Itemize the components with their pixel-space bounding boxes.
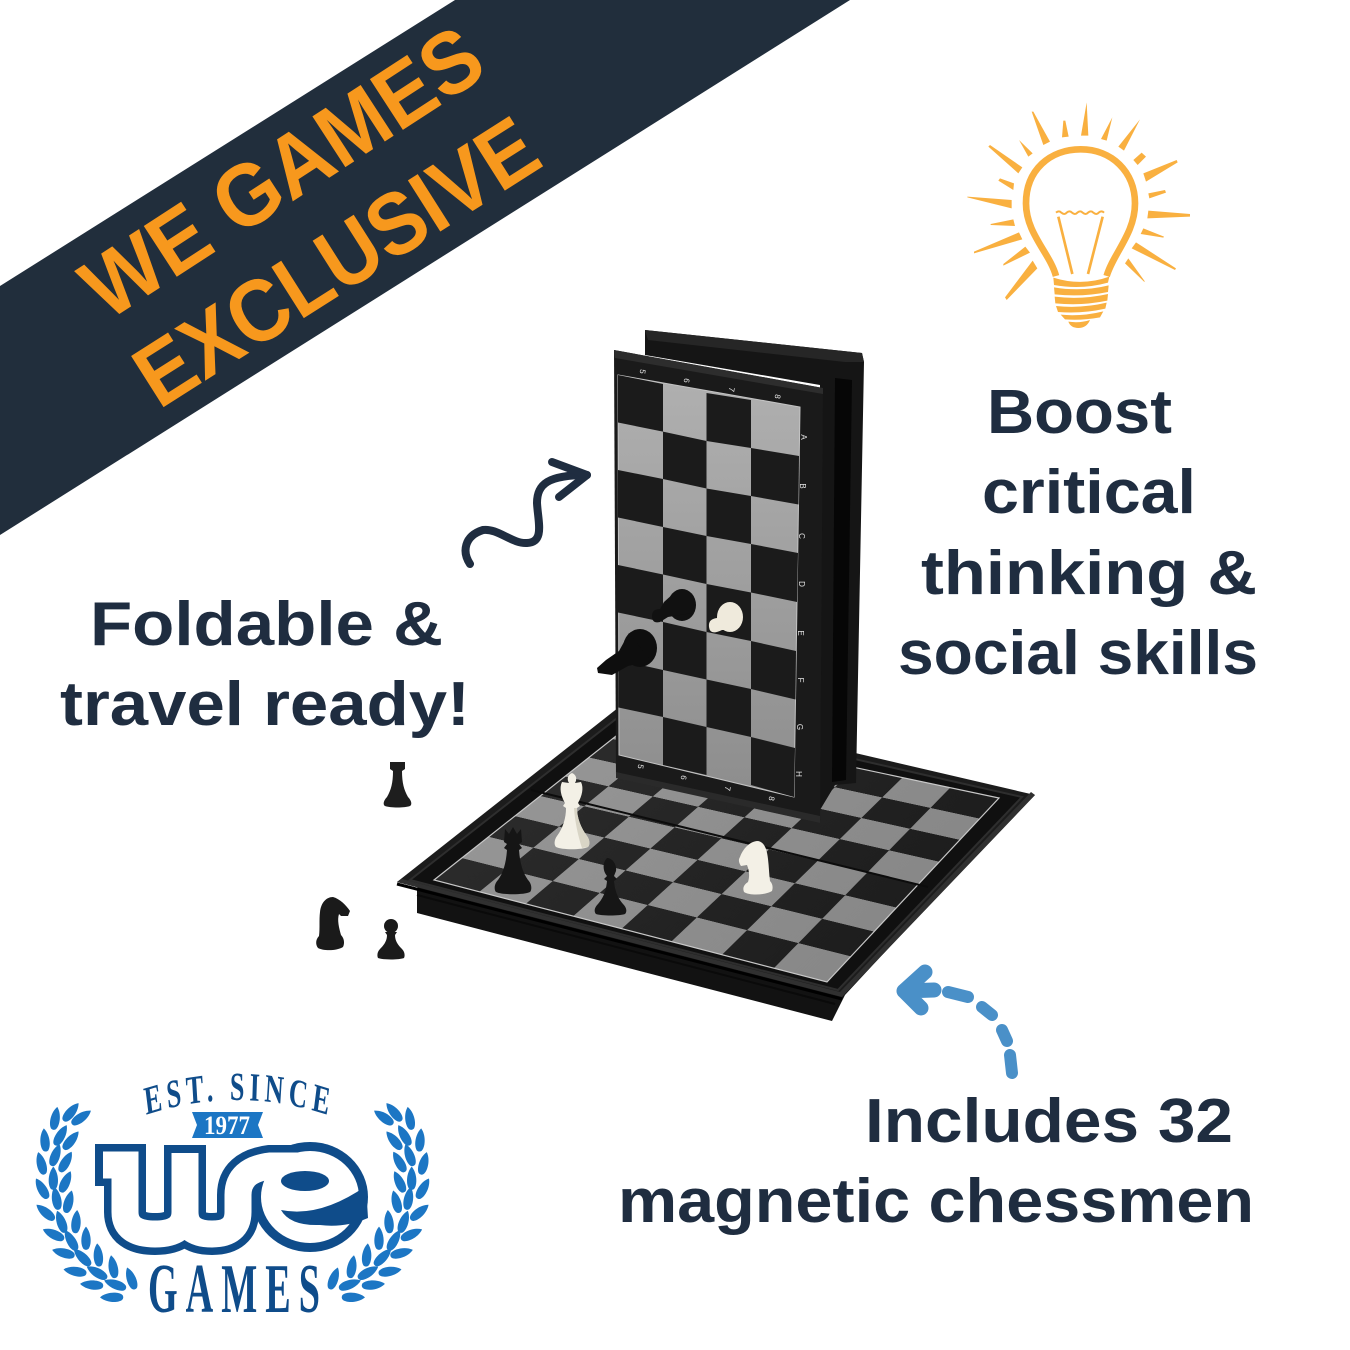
logo laurel wreath left: [32, 1100, 139, 1302]
front panel of fold board: [614, 350, 823, 823]
board coordinate labels: 5: [638, 368, 647, 375]
magnetic piece: black pawn on fold board: [652, 589, 696, 622]
board coordinate labels: D: [797, 581, 806, 587]
board coordinate labels: 5: [636, 763, 645, 770]
board coordinate labels: 6: [679, 774, 688, 781]
flat chess board: base and frame: [397, 700, 1035, 1021]
flat chess board: checker squares: [434, 721, 999, 982]
chess piece: loose black knight: [316, 897, 350, 950]
dark squares of fold board: [618, 375, 799, 797]
board coordinate labels: E: [796, 630, 805, 636]
text: foldable and travel ready: Foldable &: [90, 590, 443, 659]
board coordinate labels: 8: [767, 795, 776, 802]
text: includes 32 magnetic chessmen: Includes 32: [865, 1087, 1233, 1156]
chess piece: black queen on flat board: [495, 827, 531, 894]
text: boost critical thinking and social skills: [898, 378, 1258, 688]
logo text: GAMES: GAMES: [148, 1251, 328, 1328]
light squares of fold board: [618, 375, 800, 797]
text: includes 32 magnetic chessmen: [618, 1087, 1254, 1236]
board coordinate labels: H: [794, 771, 803, 777]
logo laurel wreath right: [326, 1100, 433, 1302]
text: boost critical thinking and social skills: critical: [982, 458, 1196, 527]
chess piece: white knight on flat board: [739, 841, 773, 895]
arrow: squiggle pointing to fold board: [466, 462, 587, 564]
board coordinate labels: 6: [682, 377, 691, 384]
text: boost critical thinking and social skills: thinking &: [921, 539, 1257, 608]
banner: WE Games Exclusive: [0, 0, 850, 535]
chess piece: white king on flat board: [555, 773, 589, 849]
board coordinate labels: 7: [723, 785, 732, 792]
flat board border and hinge: [434, 721, 999, 982]
text: boost critical thinking and social skills: social skills: [898, 619, 1258, 688]
magnetic piece: white pawn on fold board: [709, 602, 743, 632]
board coordinate labels: A: [799, 434, 808, 440]
text: includes 32 magnetic chessmen: magnetic chessmen: [618, 1167, 1254, 1236]
text: boost critical thinking and social skills: Boost: [987, 378, 1172, 447]
icon: light bulb: [967, 102, 1190, 328]
logo wordmark: WE: [95, 1142, 368, 1252]
board coordinate labels: G: [795, 724, 804, 730]
board coordinate labels: F: [796, 678, 805, 683]
logo ribbon: 1977: 1977: [204, 1111, 250, 1140]
logo: WE Games: [36, 1074, 430, 1328]
board coordinate labels: [636, 368, 808, 802]
chess piece: loose black pawn: [377, 919, 405, 960]
text: foldable and travel ready: [60, 590, 470, 739]
text: foldable and travel ready: travel ready!: [60, 670, 470, 739]
magnetic piece: black king on fold board: [597, 629, 657, 675]
back panel of fold board: [645, 330, 864, 810]
folded chess board standing upright: [597, 330, 864, 823]
banner text line: EXCLUSIVE: EXCLUSIVE: [116, 97, 556, 426]
board coordinate labels: 8: [773, 393, 782, 400]
board coordinate labels: C: [797, 533, 806, 539]
arrow: dashed blue pointing to flat board: [904, 972, 1012, 1073]
board coordinate labels: 7: [727, 386, 736, 393]
chess piece: black bishop on flat board: [595, 858, 626, 916]
board coordinate labels: B: [798, 483, 807, 489]
chess piece: loose black rook: [384, 762, 411, 808]
logo text: EST. SINCE: EST. SINCE: [143, 1074, 330, 1115]
